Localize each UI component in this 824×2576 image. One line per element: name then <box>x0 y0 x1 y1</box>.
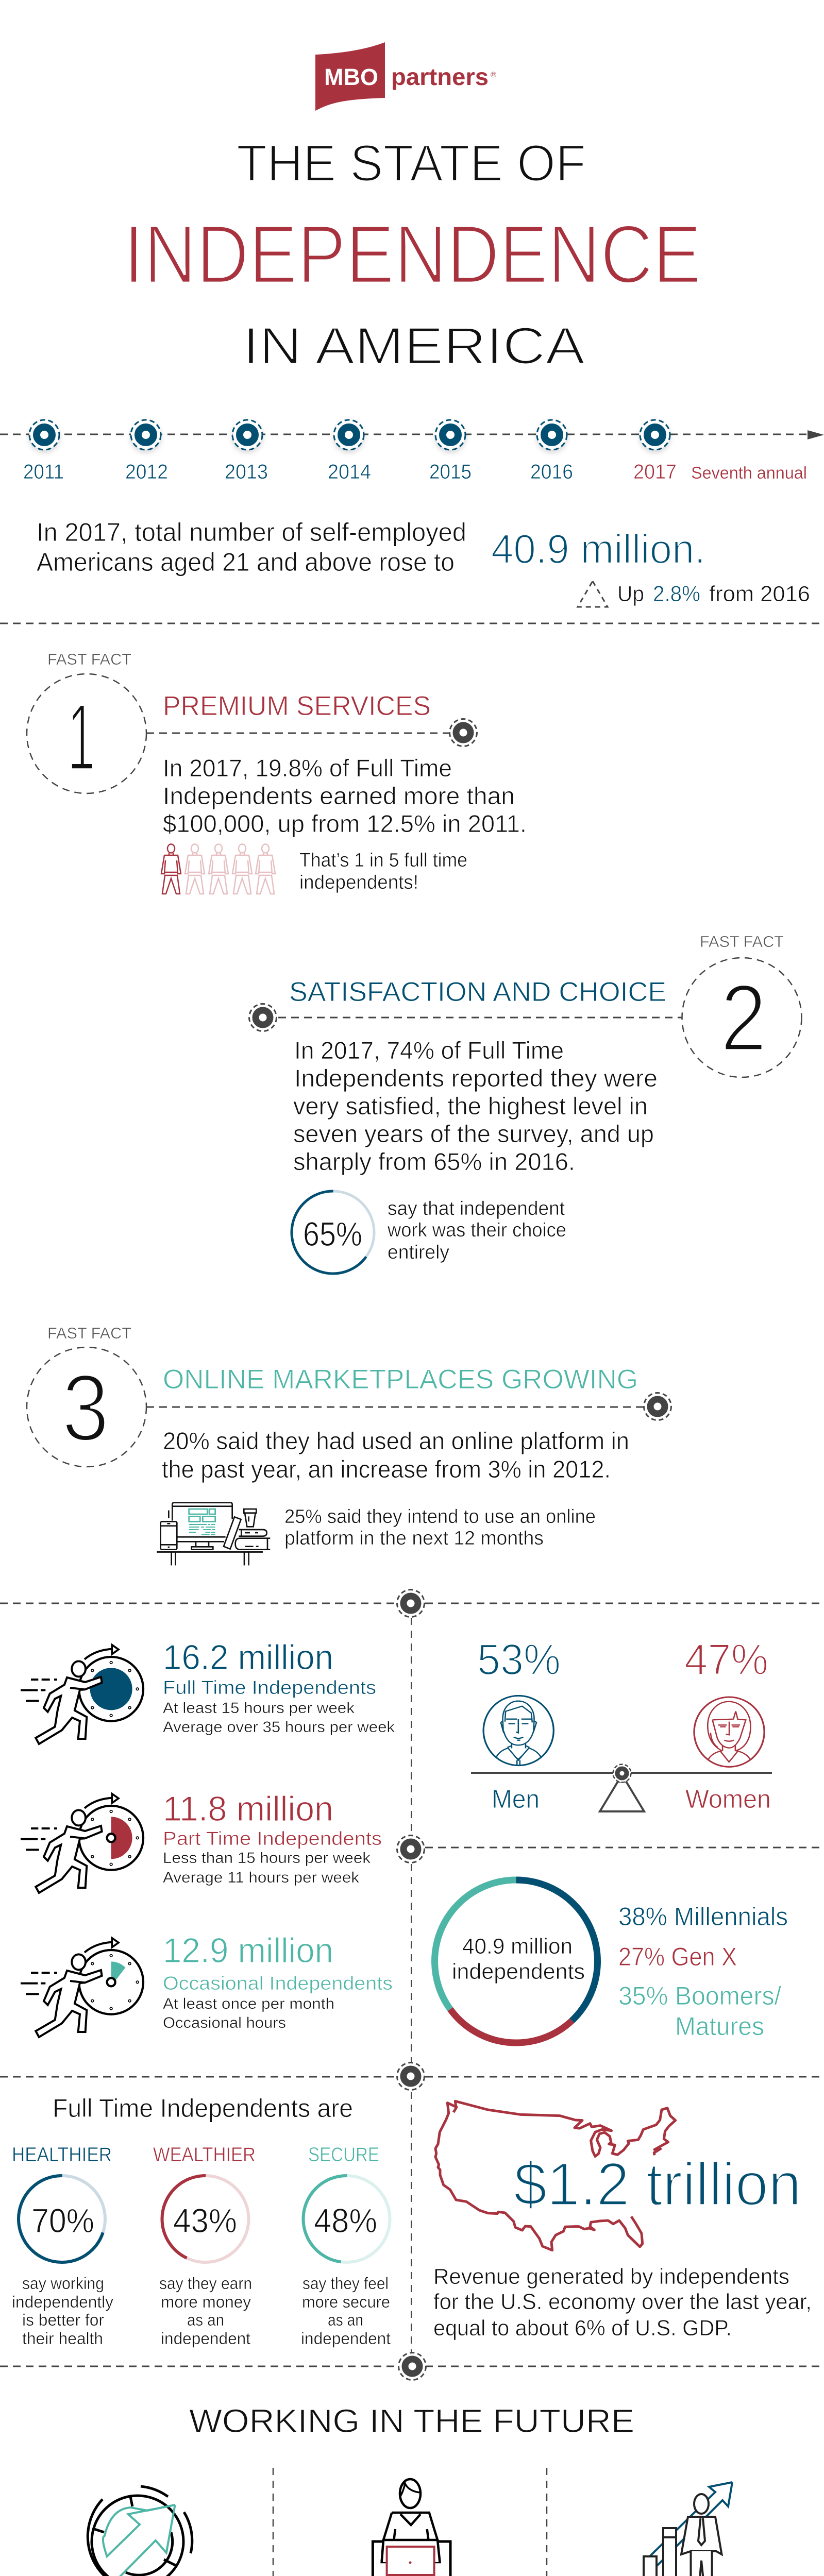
number circle 2: 2 <box>720 964 767 1071</box>
body text: seven years of the survey, and up <box>293 1120 654 1147</box>
ring: healthier 70%: independently <box>12 2293 113 2311</box>
body text: very satisfied, the highest level in <box>293 1092 648 1120</box>
ring: wealthier 43% <box>153 2144 256 2348</box>
icon: runner pushing clock, full time <box>21 1645 143 1744</box>
stat: 16.2 million full time: Full Time Independents <box>163 1677 376 1698</box>
logo: MBO Partners: MBO <box>324 64 378 90</box>
stat: 12.9 million occasional: Occasional hours <box>163 2014 286 2031</box>
timeline 2011 to 2017: 2015 <box>429 461 472 483</box>
title: INDEPENDENCE <box>124 208 701 301</box>
panel: fast fact 2 satisfaction and choice <box>249 933 802 1274</box>
timeline 2011 to 2017: 2017 <box>633 461 677 483</box>
donut legend: 38% Millennials <box>618 1902 788 1931</box>
revenue text <box>433 2264 812 2341</box>
panel: full time independents are <box>12 2094 391 2348</box>
ring: healthier 70% <box>12 2144 113 2348</box>
ring: wealthier 43%: independent <box>161 2329 250 2348</box>
number circle 3: 3 <box>62 1354 109 1461</box>
number circle 3 <box>27 1347 146 1467</box>
panel: 3.1% growth <box>27 2486 239 2576</box>
logo: MBO Partners <box>315 42 496 111</box>
ring: wealthier 43%: WEALTHIER <box>153 2144 256 2166</box>
timeline 2011 to 2017: 2016 <box>530 461 573 483</box>
logo: MBO Partners: partners <box>391 63 489 90</box>
heading: online marketplaces growing: ONLINE MARKETPLACES GROWING <box>163 1364 638 1395</box>
donut chart: generations: independents <box>452 1959 585 1984</box>
icon caption <box>284 1506 596 1549</box>
ring: wealthier 43%: 43% <box>173 2201 237 2240</box>
ring: healthier 70%: HEALTHIER <box>12 2144 112 2166</box>
icon: businessman with bars and rising arrow <box>644 2482 732 2576</box>
intro statement: Americans aged 21 and above rose to <box>37 548 455 577</box>
heading: Full Time Independents are <box>53 2094 353 2123</box>
ring: healthier 70%: say working <box>22 2274 104 2293</box>
ring chart: 65%: 65% <box>303 1215 362 1253</box>
revenue text: Revenue generated by independents <box>433 2264 789 2289</box>
intro statement: In 2017, total number of self-employed <box>37 518 466 547</box>
women label: Women <box>685 1785 771 1814</box>
body text: In 2017, 19.8% of Full Time <box>163 754 452 782</box>
body text <box>293 1037 658 1175</box>
ring caption: work was their choice <box>387 1219 566 1241</box>
icon: five people, one highlighted <box>161 844 275 894</box>
growth note with dashed triangle: 2.8% <box>653 582 700 606</box>
icon: woman portrait <box>694 1697 764 1767</box>
timeline 2011 to 2017: 2012 <box>125 461 168 483</box>
stat: 12.9 million occasional: Occasional Independents <box>163 1973 393 1994</box>
body text: Independents reported they were <box>294 1064 658 1092</box>
heading: premium services: PREMIUM SERVICES <box>163 691 431 721</box>
map: United States outline <box>435 2101 676 2250</box>
revenue text: equal to about 6% of U.S. GDP. <box>433 2316 732 2341</box>
ring caption: say that independent <box>388 1198 565 1219</box>
ring: secure 48%: say they feel <box>302 2274 389 2293</box>
stat: 11.8 million part time: 11.8 million <box>163 1789 333 1828</box>
ring caption: entirely <box>388 1242 449 1263</box>
stat: 11.8 million part time: Part Time Independents <box>163 1828 382 1849</box>
icon: person with laptop at desk <box>373 2479 450 2576</box>
ring: healthier 70%: their health <box>22 2329 103 2348</box>
icon: desk with monitor, phone and books <box>157 1503 270 1565</box>
men label: Men <box>492 1785 540 1814</box>
body text: the past year, an increase from 3% in 2012. <box>162 1455 611 1483</box>
ring caption <box>387 1198 566 1263</box>
people caption: That’s 1 in 5 full time <box>299 850 467 871</box>
donut chart: generations <box>435 1880 598 2043</box>
ring: healthier 70%: 70% <box>31 2201 94 2240</box>
icon: man portrait <box>483 1696 553 1766</box>
body text <box>162 1427 629 1483</box>
intro statement <box>37 518 466 577</box>
donut legend: Matures <box>675 2012 764 2041</box>
panel: 47.6 million <box>573 2482 805 2576</box>
stat: 12.9 million occasional: 12.9 million <box>163 1931 333 1970</box>
timeline 2011 to 2017: Seventh annual <box>691 463 807 482</box>
panel: fast fact 1 premium services: FAST FACT <box>47 650 131 668</box>
icon caption: 25% said they intend to use an online <box>284 1506 596 1528</box>
people caption <box>299 850 467 893</box>
section node <box>399 2352 426 2380</box>
stat: 16.2 million full time: Average over 35 hours per week <box>163 1719 395 1736</box>
panel: fast fact 1 premium services <box>27 650 527 894</box>
timeline 2011 to 2017: 2013 <box>225 461 268 483</box>
men percentage: 53% <box>477 1635 561 1684</box>
section node <box>397 2063 425 2090</box>
body text: $100,000, up from 12.5% in 2011. <box>163 810 527 837</box>
stat: 11.8 million part time: Less than 15 hours per week <box>163 1850 371 1867</box>
section node <box>397 1835 425 1863</box>
headline number: 40.9 million: 40.9 million. <box>491 526 705 572</box>
body text: sharply from 65% in 2016. <box>293 1148 575 1175</box>
body text: 20% said they had used an online platform in <box>163 1427 629 1454</box>
body text <box>163 754 527 837</box>
icon: target with teal arrow <box>88 2486 192 2576</box>
number circle 1 <box>27 674 146 793</box>
donut chart: generations: 40.9 million <box>462 1934 573 1959</box>
ring: wealthier 43%: more money <box>161 2293 251 2311</box>
ring: healthier 70%: is better for <box>22 2311 104 2329</box>
icon: runner pushing clock, part time <box>21 1794 143 1893</box>
icon caption: platform in the next 12 months <box>284 1528 544 1549</box>
panel: gender split balance <box>471 1635 772 1814</box>
title <box>124 134 701 375</box>
ring: secure 48%: as an <box>328 2311 363 2329</box>
title: THE STATE OF <box>237 134 586 192</box>
ring: wealthier 43%: say they earn <box>159 2274 252 2293</box>
ring chart: 65% <box>292 1191 374 1274</box>
ring: secure 48%: SECURE <box>308 2144 379 2166</box>
heading: working in the future: WORKING IN THE FUTURE <box>189 2402 634 2439</box>
panel: 50% <box>302 2479 524 2576</box>
heading: satisfaction and choice: SATISFACTION AND CHOICE <box>289 977 666 1007</box>
number circle 1: 1 <box>68 684 95 790</box>
section node <box>397 1590 425 1617</box>
stat: 16.2 million full time <box>163 1638 395 1736</box>
donut legend: 35% Boomers/ <box>618 1981 781 2010</box>
donut legend: 27% Gen X <box>618 1942 737 1971</box>
donut legend <box>618 1902 788 2041</box>
number circle 2 <box>682 958 802 1077</box>
timeline 2011 to 2017: 2014 <box>328 461 371 483</box>
ring: wealthier 43%: as an <box>187 2311 224 2329</box>
women percentage: 47% <box>684 1635 768 1684</box>
ring: secure 48%: 48% <box>314 2201 377 2240</box>
stat: $1.2 trillion: $1.2 trillion <box>514 2150 801 2218</box>
logo: MBO Partners: ® <box>491 71 496 79</box>
body text: In 2017, 74% of Full Time <box>294 1037 564 1064</box>
stat: 16.2 million full time: 16.2 million <box>163 1638 333 1677</box>
stat: 11.8 million part time <box>163 1789 382 1886</box>
ring: secure 48%: independent <box>301 2329 391 2348</box>
ring: secure 48% <box>301 2144 391 2348</box>
people caption: independents! <box>299 872 418 893</box>
stat: 12.9 million occasional <box>163 1931 393 2031</box>
title: IN AMERICA <box>243 317 585 375</box>
ring: secure 48%: more secure <box>302 2293 390 2311</box>
growth note with dashed triangle: from 2016 <box>709 582 810 606</box>
growth note with dashed triangle: Up <box>617 582 644 606</box>
revenue text: for the U.S. economy over the last year, <box>433 2290 812 2314</box>
panel: fast fact 3 online marketplaces <box>27 1324 671 1565</box>
icon: runner pushing clock, occasional <box>21 1938 143 2037</box>
timeline 2011 to 2017: 2011 <box>23 461 64 483</box>
timeline 2011 to 2017 <box>0 420 824 483</box>
growth note with dashed triangle <box>578 581 810 607</box>
stat: 12.9 million occasional: At least once per month <box>163 1995 334 2012</box>
body text: Independents earned more than <box>163 782 515 809</box>
panel: fast fact 2 satisfaction and choice: FAST FACT <box>700 933 784 951</box>
panel: fast fact 3 online marketplaces: FAST FACT <box>47 1324 131 1342</box>
balance scale <box>471 1764 772 1811</box>
stat: 16.2 million full time: At least 15 hours per week <box>163 1700 355 1717</box>
stat: 11.8 million part time: Average 11 hours per week <box>163 1869 360 1886</box>
